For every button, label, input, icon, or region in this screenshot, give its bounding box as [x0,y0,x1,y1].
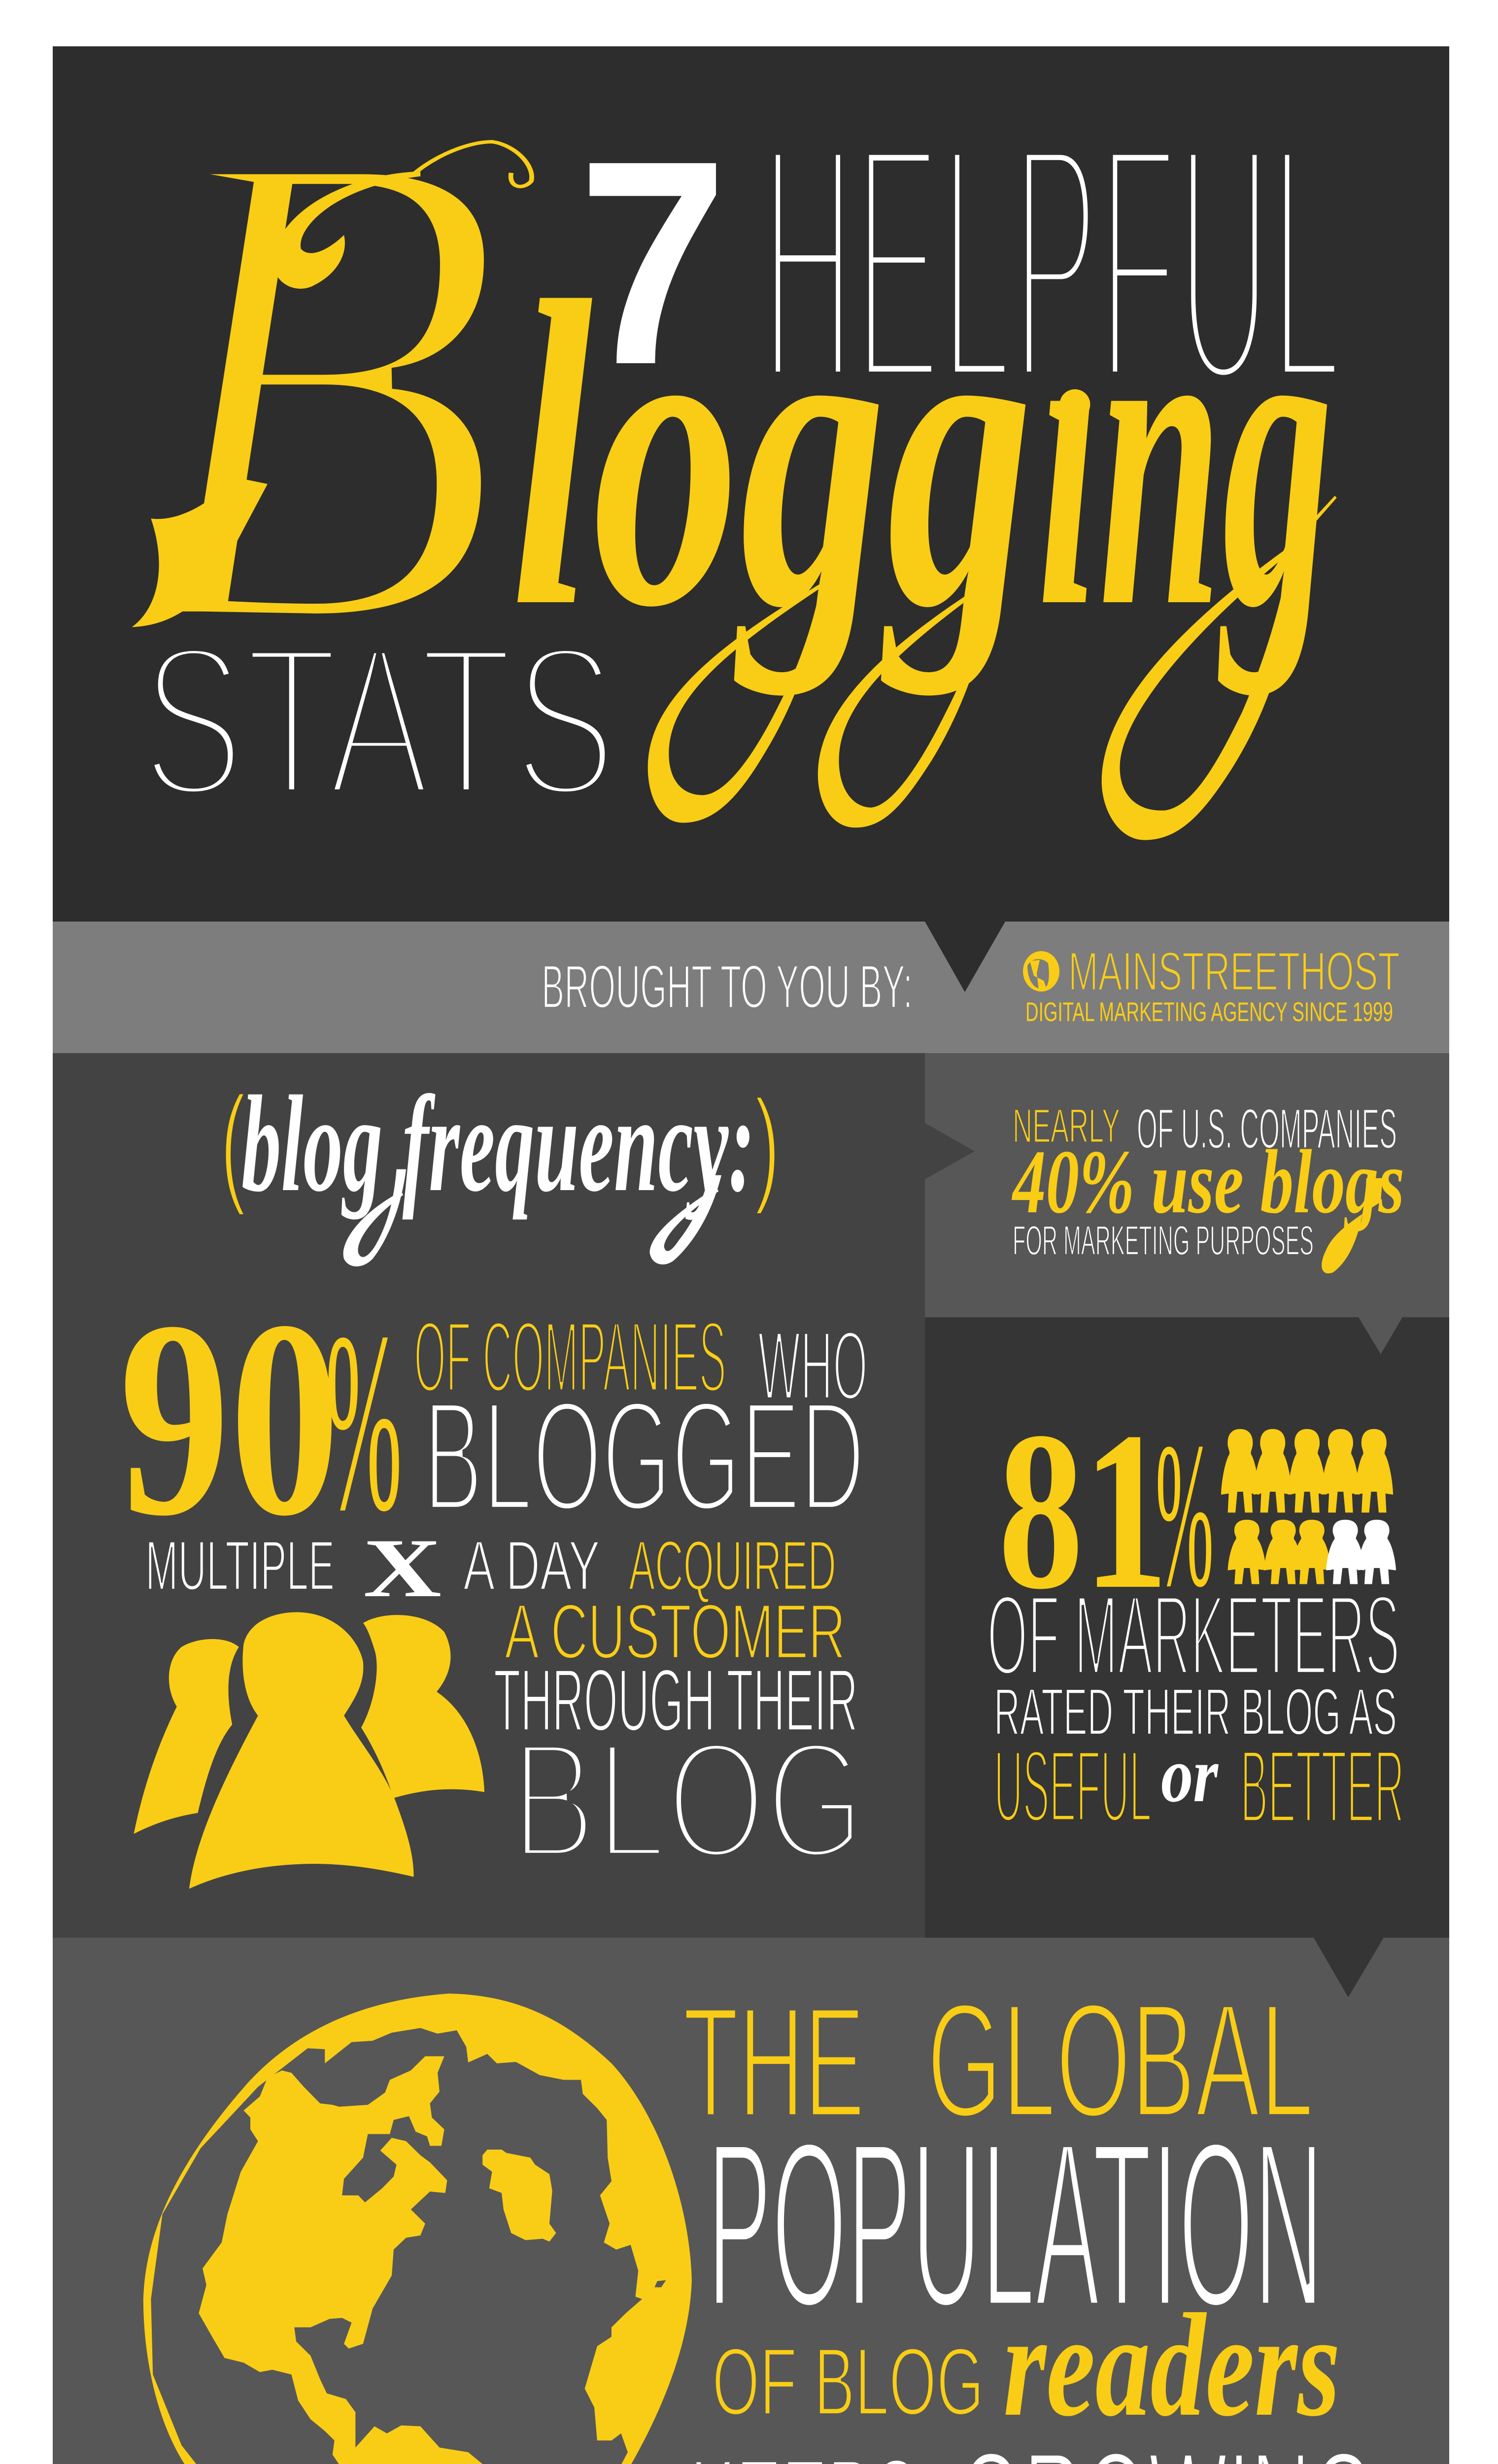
panel: title [53,0,1449,922]
text: blog: BLOG [511,1707,865,1894]
heading: blog frequency [220,1067,781,1266]
panel: 81 percent of marketers: USEFUL [994,1729,1152,1844]
panel: blog frequency [53,1053,925,1938]
arrow: band pointer [925,922,1005,992]
panel: blog frequency: OF COMPANIES [414,1300,726,1413]
heading: blogging capital: B [132,0,507,774]
panel: 81 percent of marketers: % [1156,1400,1214,1629]
panel: global population [53,1938,1449,2464]
heading: blogging first letters: logg [511,211,1033,698]
panel: blog frequency: THROUGH THEIR [494,1651,858,1750]
arrow: upper panel pointer [1314,1938,1384,1997]
text: x: X [363,1522,442,1614]
panel: 81 percent of marketers [925,1317,1449,1938]
heading: blog frequency: ( [220,1069,246,1218]
icon: globe [143,1993,692,2464]
panel: blog frequency: % [325,1280,402,1564]
icon: rows of people [1221,1429,1396,1584]
heading: blog frequency: ) [754,1073,781,1217]
flourish on blogs [1322,1178,1383,1273]
text: a customer: A CUSTOMER [505,1588,846,1675]
heading: 7: 7 [578,101,728,425]
heading: stats: STATS [141,600,616,842]
icon: mainstreethost globe [1023,951,1059,992]
icon: three people [134,1612,484,1889]
heading: blog frequency: blog frequency: [241,1067,755,1220]
panel: 40 percent use blogs [925,1053,1449,1317]
text: brought to you by: BROUGHT TO YOU BY: [542,953,913,1021]
text: acquired: ACQUIRED [629,1527,836,1605]
text: nearly: NEARLY [1013,1099,1120,1153]
text: of blog: OF BLOG [712,2328,984,2435]
panel: blog frequency: WHO [758,1311,868,1421]
panel: brought to you by [53,922,1449,1053]
text: the: THE [683,1974,865,2150]
stat: 81 percent: 81 [998,1385,1168,1636]
text: multiple: MULTIPLE [145,1527,335,1605]
stat: 90 percent: 90 [119,1263,340,1574]
text: a day: A DAY [463,1527,600,1605]
flourishes on blogging [132,142,1337,840]
text: blogged: BLOGGED [423,1368,865,1544]
arrow: left panel pointer [925,1123,975,1179]
arrow: upper panel pointer [1359,1317,1402,1354]
text: or: or [1161,1731,1219,1818]
text: readers: readers [1003,2283,1340,2447]
patch hiding tall letter dot [1037,276,1131,399]
